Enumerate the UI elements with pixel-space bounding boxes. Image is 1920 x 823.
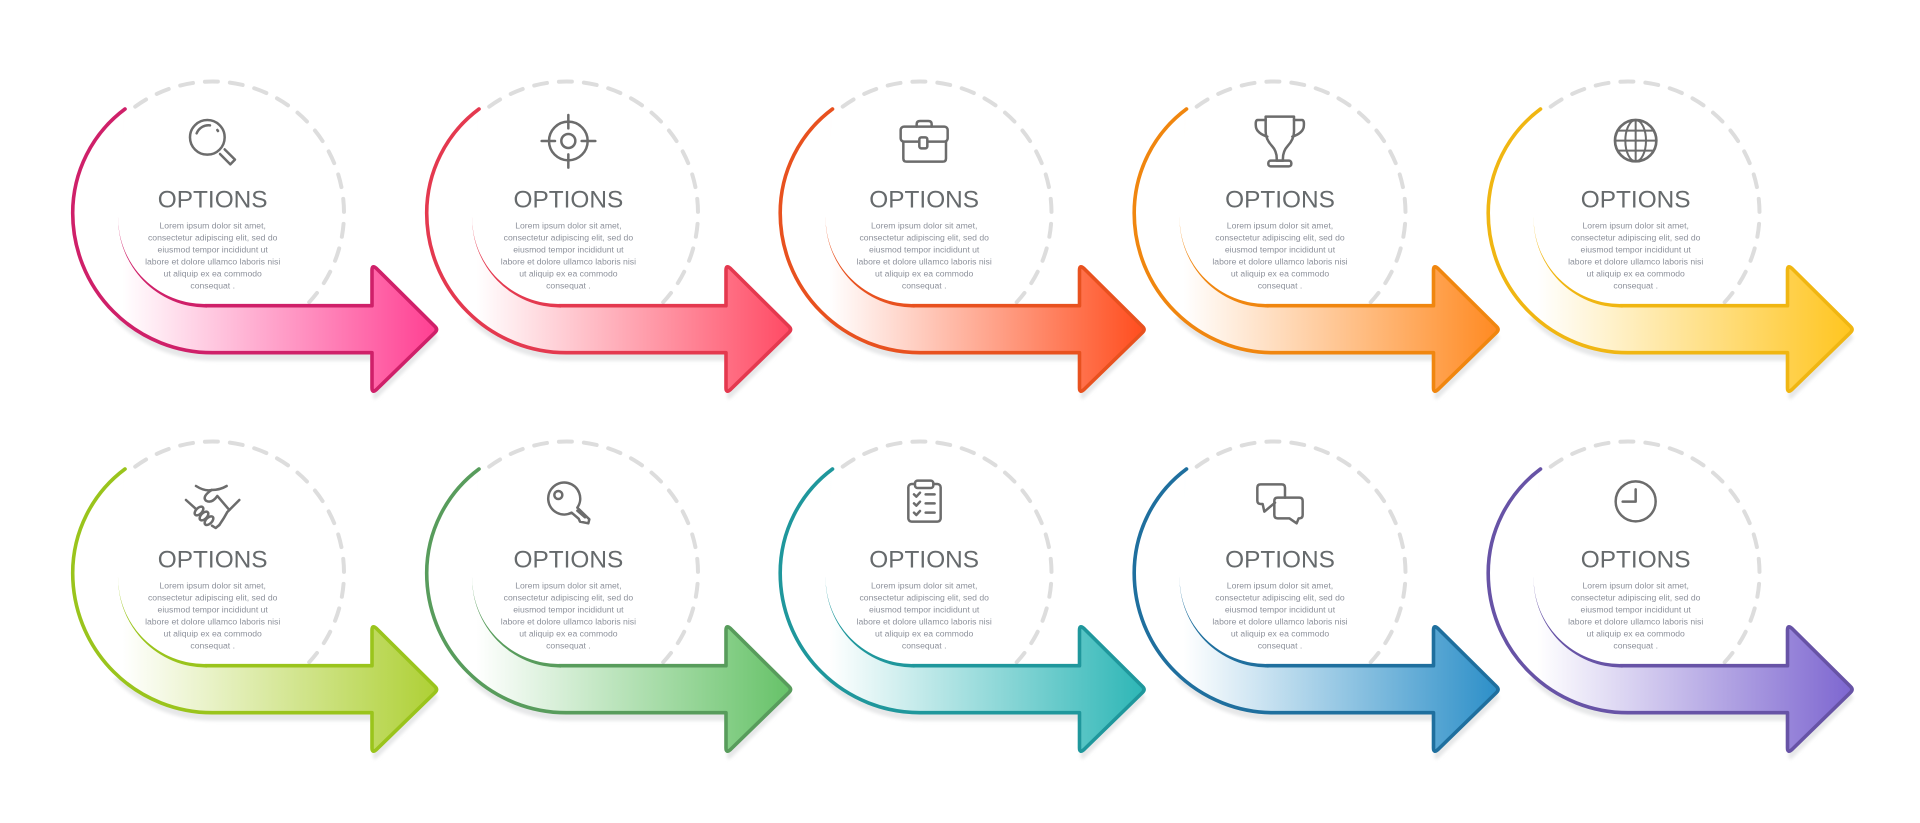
body text: eiusmod tempor incididunt ut: [869, 604, 980, 614]
card 7: green: [427, 441, 792, 759]
body text: labore et dolore ullamco laboris nisi: [857, 616, 992, 626]
body text: ut aliquip ex ea commodo: [519, 628, 618, 638]
arrow: [780, 109, 1145, 399]
body text: consequat .: [902, 640, 947, 650]
body text: labore et dolore ullamco laboris nisi: [501, 616, 636, 626]
icon: magnifier: [190, 120, 235, 164]
body text: consectetur adipiscing elit, sed do: [1571, 232, 1701, 242]
body text: ut aliquip ex ea commodo: [1231, 628, 1329, 638]
body text: consequat .: [1258, 640, 1302, 650]
body text: Lorem ipsum dolor sit amet,: [1582, 580, 1689, 590]
body text: eiusmod tempor incididunt ut: [1581, 604, 1691, 614]
body text: labore et dolore ullamco laboris nisi: [1568, 256, 1703, 266]
body text: consequat .: [546, 640, 591, 650]
card 3: orange-red: [780, 81, 1145, 399]
dashed ring: [1551, 81, 1760, 302]
card 5: yellow: [1488, 81, 1853, 399]
heading: OPTIONS: [869, 187, 979, 214]
body text: eiusmod tempor incididunt ut: [513, 604, 624, 614]
body text: eiusmod tempor incididunt ut: [1581, 244, 1691, 254]
body text: consectetur adipiscing elit, sed do: [148, 592, 278, 602]
body text: consectetur adipiscing elit, sed do: [1215, 592, 1345, 602]
body text: Lorem ipsum dolor sit amet,: [1227, 220, 1333, 230]
dashed ring: [489, 81, 698, 302]
body text: Lorem ipsum dolor sit amet,: [871, 580, 977, 590]
dashed ring: [1551, 441, 1760, 662]
body text: Lorem ipsum dolor sit amet,: [159, 580, 266, 590]
arrow: [73, 109, 437, 399]
icon: trophy: [1256, 117, 1304, 166]
body text: consectetur adipiscing elit, sed do: [859, 232, 989, 242]
body text: labore et dolore ullamco laboris nisi: [145, 616, 280, 626]
body text: consequat .: [1613, 640, 1658, 650]
icon: clock: [1616, 481, 1656, 521]
body text: consectetur adipiscing elit, sed do: [1215, 232, 1345, 242]
body text: labore et dolore ullamco laboris nisi: [1212, 256, 1348, 266]
icon: handshake: [186, 486, 239, 528]
heading: OPTIONS: [514, 187, 623, 214]
body text: ut aliquip ex ea commodo: [1587, 628, 1685, 638]
card 2: red: [427, 81, 792, 399]
body text: labore et dolore ullamco laboris nisi: [857, 256, 992, 266]
icon: key: [548, 483, 589, 523]
dashed ring: [489, 441, 698, 662]
heading: OPTIONS: [869, 547, 979, 574]
heading: OPTIONS: [158, 547, 268, 574]
icon: briefcase: [901, 121, 948, 162]
arrow: [1134, 469, 1499, 759]
body text: consectetur adipiscing elit, sed do: [1571, 592, 1701, 602]
body text: labore et dolore ullamco laboris nisi: [501, 256, 636, 266]
dashed ring: [1197, 81, 1406, 302]
card 10: purple: [1488, 441, 1853, 759]
body text: Lorem ipsum dolor sit amet,: [515, 580, 622, 590]
heading: OPTIONS: [158, 187, 268, 214]
body text: consectetur adipiscing elit, sed do: [148, 232, 278, 242]
arrow: [780, 469, 1145, 759]
dashed ring: [843, 441, 1052, 662]
arrow: [1488, 469, 1853, 759]
dashed ring: [1197, 441, 1406, 662]
dashed ring: [135, 441, 344, 662]
body text: consequat .: [190, 640, 235, 650]
body text: Lorem ipsum dolor sit amet,: [159, 220, 266, 230]
body text: Lorem ipsum dolor sit amet,: [1227, 580, 1333, 590]
body text: ut aliquip ex ea commodo: [875, 268, 974, 278]
heading: OPTIONS: [1225, 547, 1335, 574]
body text: ut aliquip ex ea commodo: [1231, 268, 1329, 278]
icon: chat bubbles: [1257, 484, 1303, 523]
dashed ring: [135, 81, 344, 302]
body text: Lorem ipsum dolor sit amet,: [871, 220, 977, 230]
card 1: magenta: [73, 81, 437, 399]
body text: eiusmod tempor incididunt ut: [513, 244, 624, 254]
body text: consequat .: [1258, 280, 1302, 290]
heading: OPTIONS: [1225, 187, 1335, 214]
arrow: [1134, 109, 1499, 399]
body text: consequat .: [902, 280, 947, 290]
icon: clipboard: [908, 481, 941, 522]
body text: Lorem ipsum dolor sit amet,: [515, 220, 622, 230]
body text: ut aliquip ex ea commodo: [164, 628, 262, 638]
arrow: [73, 469, 437, 759]
body text: consectetur adipiscing elit, sed do: [859, 592, 989, 602]
body text: eiusmod tempor incididunt ut: [158, 604, 268, 614]
body text: consectetur adipiscing elit, sed do: [504, 232, 633, 242]
arrow: [427, 109, 792, 399]
body text: consectetur adipiscing elit, sed do: [504, 592, 633, 602]
body text: Lorem ipsum dolor sit amet,: [1582, 220, 1689, 230]
arrow: [427, 469, 792, 759]
body text: labore et dolore ullamco laboris nisi: [1212, 616, 1348, 626]
body text: ut aliquip ex ea commodo: [519, 268, 618, 278]
card 9: blue: [1134, 441, 1499, 759]
body text: eiusmod tempor incididunt ut: [1225, 604, 1336, 614]
icon: target: [542, 115, 595, 168]
body text: consequat .: [546, 280, 591, 290]
body text: ut aliquip ex ea commodo: [1587, 268, 1685, 278]
heading: OPTIONS: [1581, 547, 1691, 574]
card 4: orange: [1134, 81, 1499, 399]
icon: globe: [1615, 120, 1656, 161]
body text: ut aliquip ex ea commodo: [875, 628, 974, 638]
heading: OPTIONS: [514, 547, 623, 574]
body text: eiusmod tempor incididunt ut: [1225, 244, 1336, 254]
heading: OPTIONS: [1581, 187, 1691, 214]
body text: labore et dolore ullamco laboris nisi: [145, 256, 280, 266]
card 8: teal: [780, 441, 1145, 759]
arrow: [1488, 109, 1853, 399]
body text: eiusmod tempor incididunt ut: [158, 244, 268, 254]
body text: labore et dolore ullamco laboris nisi: [1568, 616, 1703, 626]
card 6: lime: [73, 441, 437, 759]
body text: ut aliquip ex ea commodo: [164, 268, 262, 278]
body text: consequat .: [1613, 280, 1658, 290]
dashed ring: [843, 81, 1052, 302]
body text: eiusmod tempor incididunt ut: [869, 244, 980, 254]
body text: consequat .: [190, 280, 235, 290]
